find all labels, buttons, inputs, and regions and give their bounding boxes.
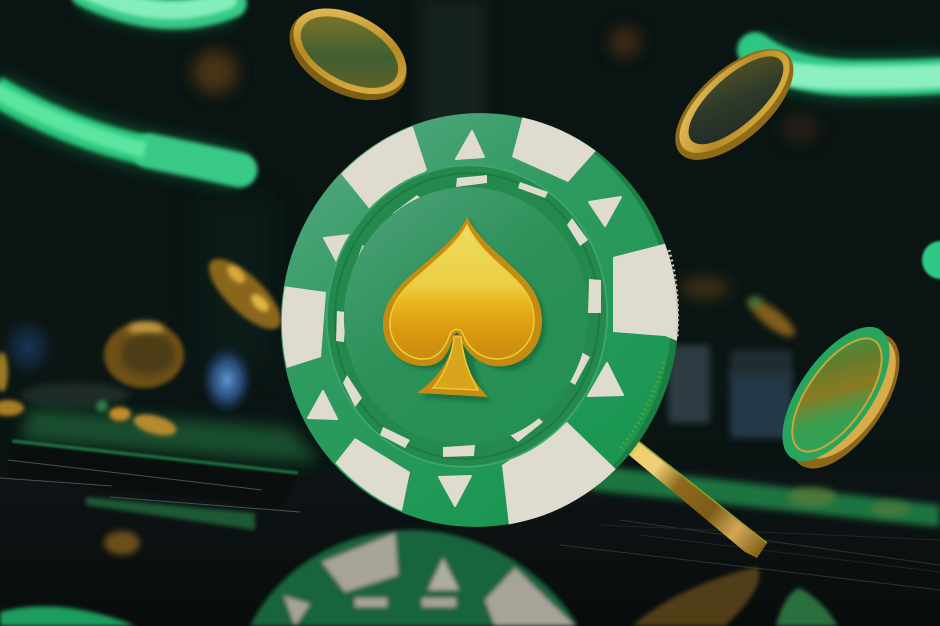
coin: leaning at chip base xyxy=(623,440,767,558)
poker chip xyxy=(280,113,680,527)
neon dot: right edge xyxy=(922,241,940,279)
chip center xyxy=(344,187,588,436)
background lights xyxy=(2,27,818,438)
coin reflections xyxy=(632,567,838,626)
chip reflection xyxy=(250,530,578,626)
chip triangles xyxy=(308,131,623,506)
neon arc: left xyxy=(0,90,240,170)
reflection glow: bottom left xyxy=(0,606,136,626)
spade shadow xyxy=(387,220,545,402)
chip ring dashes xyxy=(336,175,601,457)
icon: golden spade xyxy=(383,217,545,402)
blurred coins: left xyxy=(0,322,184,555)
neon arc: top right xyxy=(755,50,940,78)
neon arc: top left xyxy=(85,0,232,14)
table surface xyxy=(0,408,940,626)
chip white segments xyxy=(282,118,678,524)
chip inner ring xyxy=(326,166,608,468)
chip edge ticks xyxy=(669,250,678,338)
coin: top xyxy=(290,8,407,100)
chip face xyxy=(280,113,670,527)
coin: right xyxy=(782,326,900,468)
coin: top right xyxy=(675,49,794,160)
chip edge xyxy=(465,113,678,527)
coin: left mid xyxy=(206,256,282,332)
